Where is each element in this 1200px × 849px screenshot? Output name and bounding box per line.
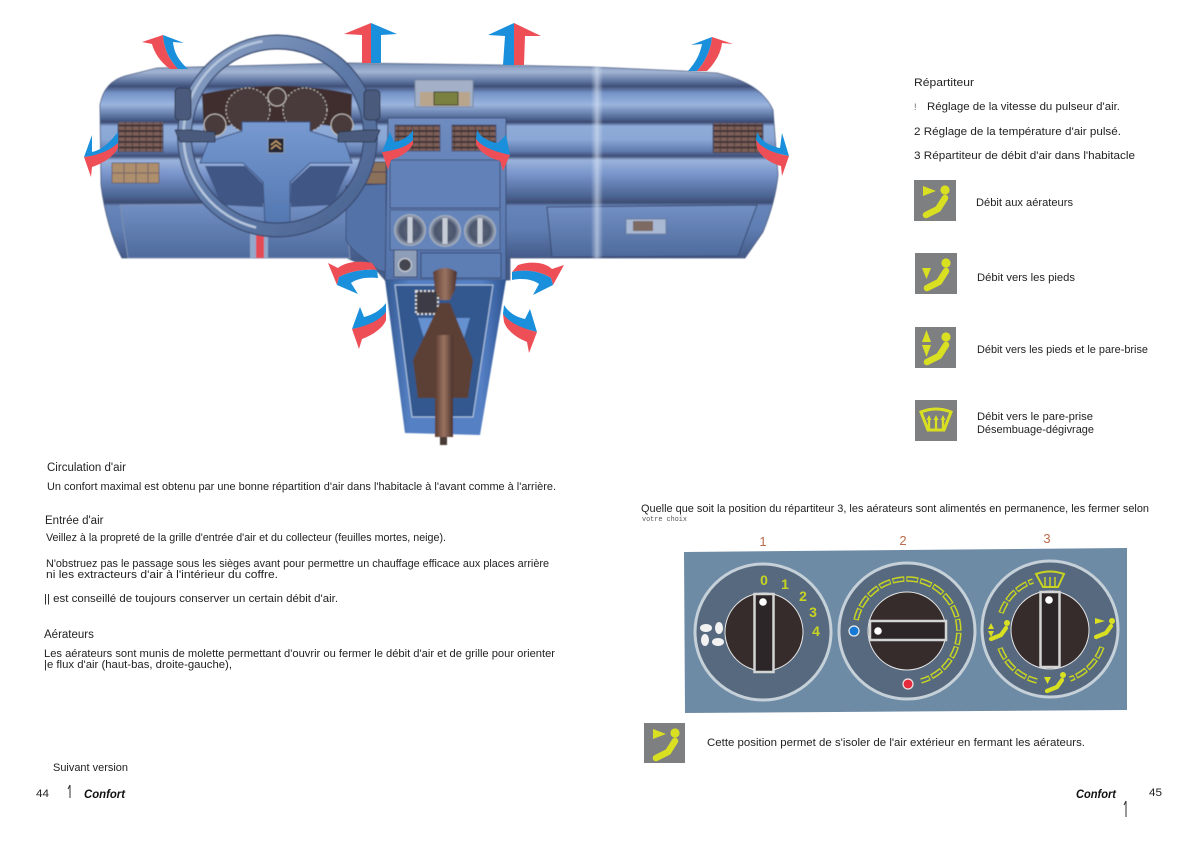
section: aérateurs: |e flux d'air (haut-bas, droite-gauche), — [44, 659, 232, 671]
arrow: top straight right — [488, 23, 541, 65]
dial 1: fan speed: 3 — [809, 604, 817, 620]
dial 2: temperature — [839, 563, 975, 699]
paragraph: position du répartiteur — [641, 503, 1149, 524]
control panel — [684, 548, 1127, 713]
arrow: centre right vent — [476, 130, 510, 171]
note: isolation: Cette position permet de s'isoler de l'air extérieur en fermant les aérateurs. — [707, 737, 1085, 749]
gear strip — [435, 335, 453, 445]
arrow: lower right upper — [512, 263, 564, 295]
legend: répartiteur text: ! — [914, 102, 917, 112]
icon: aérateurs fermés — [644, 723, 685, 763]
gear knob — [433, 268, 457, 300]
inner dark panels — [205, 166, 350, 207]
arrow: lower left lower — [352, 303, 386, 349]
icon: fan — [700, 622, 724, 646]
dial 3: distribution — [982, 561, 1118, 697]
arrow: left vent — [84, 132, 118, 177]
lighter socket — [394, 250, 417, 277]
section: entrée d'air: ni les extracteurs d'air à l'intérieur du coffre. — [46, 569, 278, 581]
section: aérateurs: Aérateurs — [44, 629, 94, 641]
section: entrée d'air: Veillez à la propreté de la grille d'entrée d'air et du collecteur (feuilles mortes, neige). — [46, 532, 446, 544]
note: suivant version: Suivant version — [53, 762, 128, 774]
steering wheel hub — [200, 122, 352, 225]
knob panel — [390, 210, 500, 250]
dial numbers: 2 — [899, 533, 907, 548]
legend: répartiteur text: 3 Répartiteur de débit d'air dans l'habitacle — [914, 150, 1135, 162]
legend: répartiteur text: Répartiteur — [914, 77, 974, 89]
label: débit vers les pieds: Débit vers les pieds — [977, 272, 1075, 284]
centre console — [385, 280, 506, 435]
air vents — [118, 122, 763, 153]
section: aérateurs — [44, 629, 555, 671]
wheel stalks — [175, 88, 380, 142]
section: circulation d'air: Circulation d'air — [47, 462, 126, 474]
dial numbers — [759, 531, 1051, 549]
section: aérateurs: Les aérateurs sont munis de molette permettant d'ouvrir ou fermer le débit d'air et de grille pour orienter — [44, 648, 555, 660]
arrow: top straight left — [344, 23, 397, 63]
icon: defrost small — [1036, 572, 1064, 588]
label: débit aux aérateurs: Débit aux aérateurs — [976, 197, 1074, 209]
footer left — [36, 785, 126, 801]
arrow: top left curved — [142, 35, 188, 69]
radio box — [415, 80, 473, 107]
legend: répartiteur text — [914, 77, 1135, 162]
glovebox handle — [626, 219, 666, 234]
arrow: right vent — [756, 132, 789, 176]
switch grid — [416, 291, 438, 314]
label: pare-brise et désembuage — [977, 411, 1094, 436]
dial 1: fan speed: 0 — [760, 572, 768, 588]
footer left: Confort — [84, 787, 126, 801]
page fold — [591, 66, 603, 258]
section: entrée d'air: || est conseillé de toujours conserver un certain débit d'air. — [44, 593, 338, 605]
knee panel — [346, 184, 386, 272]
logo badge — [268, 138, 284, 153]
icon: seat bottom — [1044, 672, 1066, 691]
icon: débit vers les pieds et le pare-brise — [915, 327, 956, 368]
arrow: lower left upper — [328, 262, 378, 294]
section: entrée d'air: Entrée d'air — [45, 515, 104, 527]
console lighter panel — [418, 318, 470, 345]
steering wheel rim — [184, 40, 372, 230]
section: circulation d'air — [47, 462, 556, 493]
icon: débit aux aérateurs — [914, 180, 956, 221]
legend: répartiteur text: Réglage de la vitesse du pulseur d'air. — [927, 101, 1120, 113]
centre upper panel — [390, 160, 500, 208]
dial numbers: 1 — [759, 534, 767, 549]
section: entrée d'air: N'obstruez pas le passage sous les sièges avant pour permettre un chauffage efficace aux places arrière — [46, 558, 549, 570]
arrow: centre left vent — [382, 130, 413, 170]
heater knobs — [394, 214, 496, 247]
dial 1: fan speed — [695, 564, 831, 700]
dial numbers: 3 — [1043, 531, 1051, 546]
left glovebox panel — [120, 203, 350, 258]
legend: répartiteur text: 2 Réglage de la température d'air pulsé. — [914, 126, 1121, 138]
gauges — [204, 88, 353, 136]
switch block left — [112, 163, 159, 183]
footer left: 44 — [36, 788, 49, 800]
illustration: dashboard — [100, 40, 778, 445]
icon: seat left — [988, 620, 1010, 639]
section: entrée d'air — [44, 515, 549, 605]
centre column — [385, 118, 506, 280]
steering column — [250, 233, 268, 258]
paragraph: position du répartiteur: Quelle que soit la position du répartiteur 3, les aérateurs sont alimentés en permanence, les fermer selon — [641, 503, 1149, 515]
panel background — [684, 548, 1127, 713]
arrow: lower right lower — [503, 305, 537, 353]
footer right: 45 — [1149, 787, 1162, 799]
dial 1: fan speed: 4 — [812, 623, 820, 639]
footer right — [1076, 787, 1162, 817]
icon: seat right — [1095, 618, 1115, 637]
dial 1: fan speed: 2 — [799, 588, 807, 604]
ashtray — [421, 253, 501, 278]
label: pare-brise et désembuage: Désembuage-dégivrage — [977, 424, 1094, 436]
footer right: Confort — [1076, 787, 1117, 801]
gear boot — [413, 303, 473, 398]
right glovebox panel — [547, 205, 757, 257]
label: débit vers les pieds et le pare-brise: Débit vers les pieds et le pare-brise — [977, 344, 1148, 356]
instrument cluster — [202, 86, 352, 132]
dial 1: fan speed: 1 — [781, 576, 789, 592]
icon: pare-brise — [915, 400, 957, 441]
icon: débit vers les pieds — [915, 253, 957, 294]
paragraph: position du répartiteur: votre choix — [642, 516, 687, 524]
arrows: airflow — [84, 23, 789, 353]
switch block right — [362, 162, 386, 184]
console inner well — [395, 285, 493, 417]
section: circulation d'air: Un confort maximal est obtenu par une bonne répartition d'air dans l'habitacle à l'avant comme à l'arrière. — [47, 481, 556, 493]
dashboard body — [100, 63, 778, 280]
label: pare-brise et désembuage: Débit vers le pare-prise — [977, 411, 1093, 423]
arrow: top right curved — [688, 37, 733, 71]
